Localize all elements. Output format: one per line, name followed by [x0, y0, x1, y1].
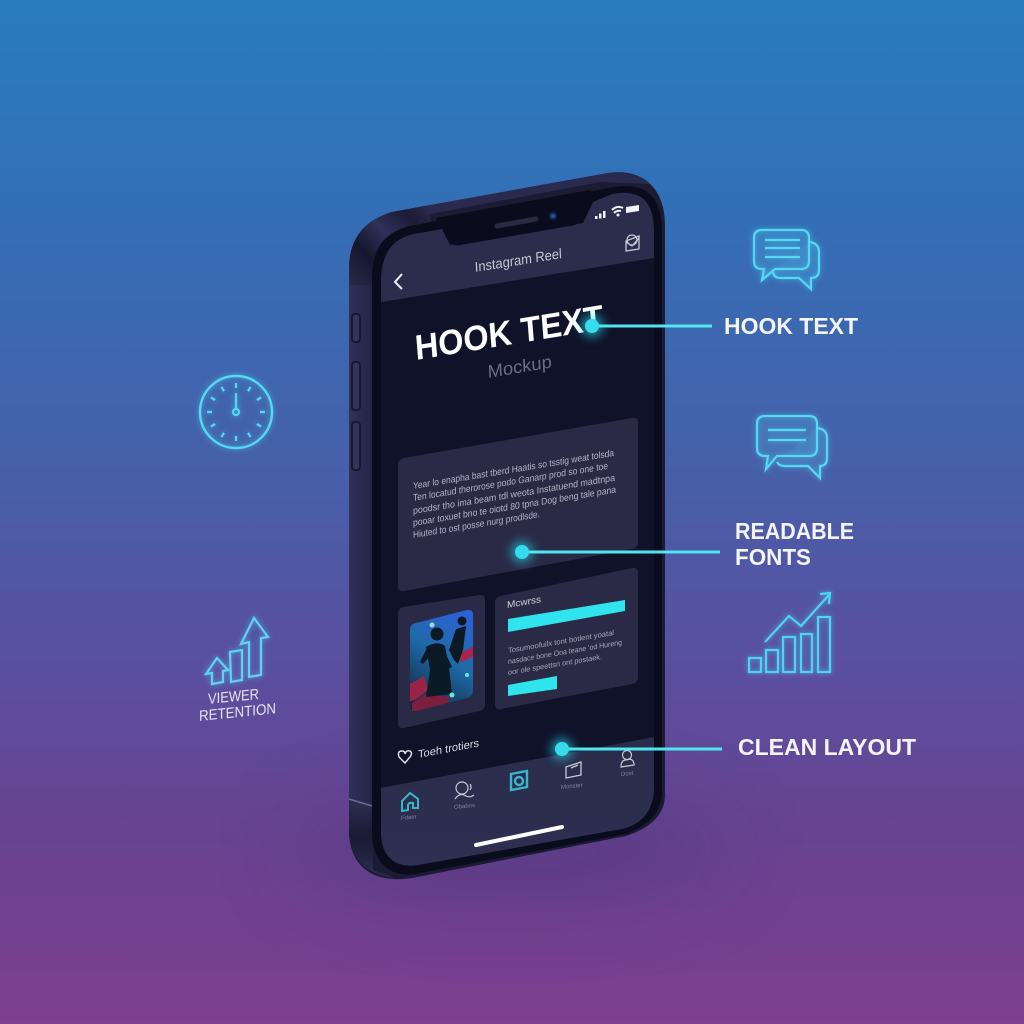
callout: hook text — [581, 313, 858, 339]
back chevron — [395, 274, 402, 289]
phone lower left corner — [349, 797, 395, 878]
label: FONTS — [735, 544, 811, 570]
card text — [508, 628, 622, 677]
footer band — [381, 737, 654, 866]
nav labels: Dost — [621, 771, 634, 778]
icon: clock — [200, 376, 272, 448]
label: CLEAN LAYOUT — [738, 734, 916, 760]
body paragraph — [413, 448, 617, 541]
icon: instagram — [511, 771, 527, 790]
body paragraph: Hiuted to ost posse nurg prodlsde. — [413, 509, 540, 541]
image card — [398, 595, 485, 728]
phone top left corner — [349, 205, 430, 285]
phone left side — [349, 285, 373, 803]
subheading: Mockup — [487, 352, 552, 382]
callout: clean layout — [551, 734, 916, 760]
nav labels: Fdam — [401, 814, 416, 822]
viewer retention label: RETENTION — [199, 700, 276, 725]
camera — [548, 212, 558, 220]
body paragraph: pooar toxuet bno te oiotd 80 tpna Dog beng tale pana — [413, 484, 617, 529]
icon: growth chart — [749, 593, 830, 672]
phone screen — [375, 180, 660, 880]
phone bezel — [372, 186, 662, 875]
phone side buttons — [352, 314, 360, 470]
phone mockup — [349, 172, 665, 880]
icon: viewer retention arrows — [206, 618, 268, 684]
phone body — [349, 172, 665, 879]
label: HOOK TEXT — [724, 313, 858, 339]
info card — [495, 568, 638, 709]
body paragraph: Ten locatud therorose podo Ganarp prod so one toe — [413, 461, 608, 504]
illustrated image — [410, 610, 473, 712]
card text: Tosumoofuilx tont botlent yoatal — [508, 628, 614, 655]
icon: user — [621, 750, 634, 767]
figures — [420, 616, 466, 697]
likes text: Toeh trotiers — [418, 737, 479, 761]
notch — [436, 190, 598, 245]
card text: nasdace bone Ooa teane 'od Hureng — [508, 638, 622, 666]
screen title: Instagram Reel — [474, 245, 562, 275]
callout: readable fonts — [511, 518, 854, 570]
cyan bars — [508, 600, 625, 632]
icon: chat bubbles middle — [757, 416, 827, 478]
viewer retention label — [199, 686, 276, 725]
viewer retention label: VIEWER — [208, 686, 259, 708]
icon: home — [402, 793, 418, 811]
icon: share bag — [626, 235, 639, 251]
phone drop shadow — [290, 810, 730, 890]
icon: card — [566, 762, 581, 778]
card text: oor ole speettsn ont postaek. — [508, 652, 602, 677]
icon: chat bubbles top — [754, 230, 819, 289]
nav labels — [401, 771, 634, 822]
text panel — [398, 418, 638, 591]
phone top bevel highlight — [425, 172, 650, 215]
header band — [381, 192, 654, 302]
hook text heading: HOOK TEXT — [414, 298, 605, 368]
speaker — [497, 219, 536, 226]
body paragraph: poodsr tho ima beam tdl weota Instatuend madtnpa — [413, 473, 616, 517]
antenna band — [349, 799, 372, 806]
icon: people — [455, 782, 474, 799]
home indicator — [476, 827, 562, 845]
label: READABLE — [735, 518, 854, 544]
nav labels: Obabos — [454, 803, 475, 811]
nav labels: Monster — [561, 783, 583, 791]
status bar icons — [595, 205, 639, 219]
card heading: Mcwrss — [507, 594, 541, 611]
bottom navigation — [401, 750, 634, 822]
body paragraph: Year lo enapha bast tberd Haatis so tsstig weat tolsda — [413, 448, 615, 492]
icon: heart — [398, 751, 412, 763]
